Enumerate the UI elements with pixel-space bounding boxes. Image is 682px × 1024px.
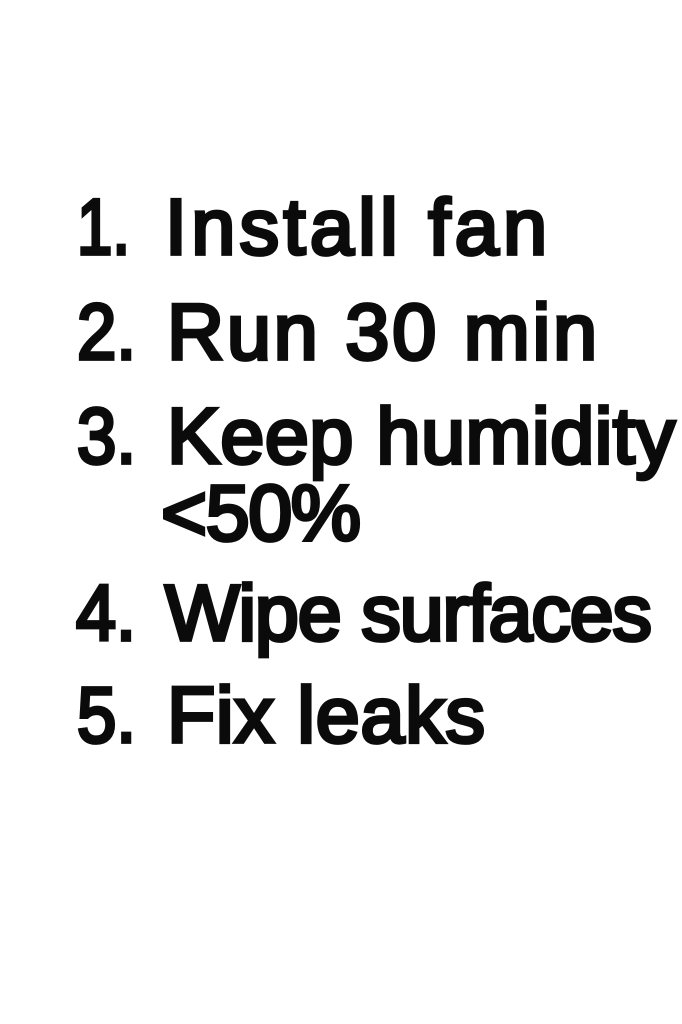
step 1: 1. bbox=[77, 182, 130, 271]
step 3: <50% bbox=[161, 468, 361, 557]
step 4: Wipe surfaces bbox=[165, 568, 652, 657]
step 2: 2. bbox=[77, 287, 136, 376]
step 5: 5. bbox=[77, 670, 136, 759]
step 3: 3. bbox=[77, 391, 136, 480]
step 3: Keep humidity bbox=[167, 391, 676, 480]
step 5: Fix leaks bbox=[167, 670, 485, 759]
numbered list bbox=[76, 182, 676, 759]
step 2: Run 30 min bbox=[167, 287, 597, 376]
step 3 bbox=[77, 391, 676, 557]
step 4: 4. bbox=[76, 568, 136, 657]
step 1: Install fan bbox=[165, 182, 547, 271]
